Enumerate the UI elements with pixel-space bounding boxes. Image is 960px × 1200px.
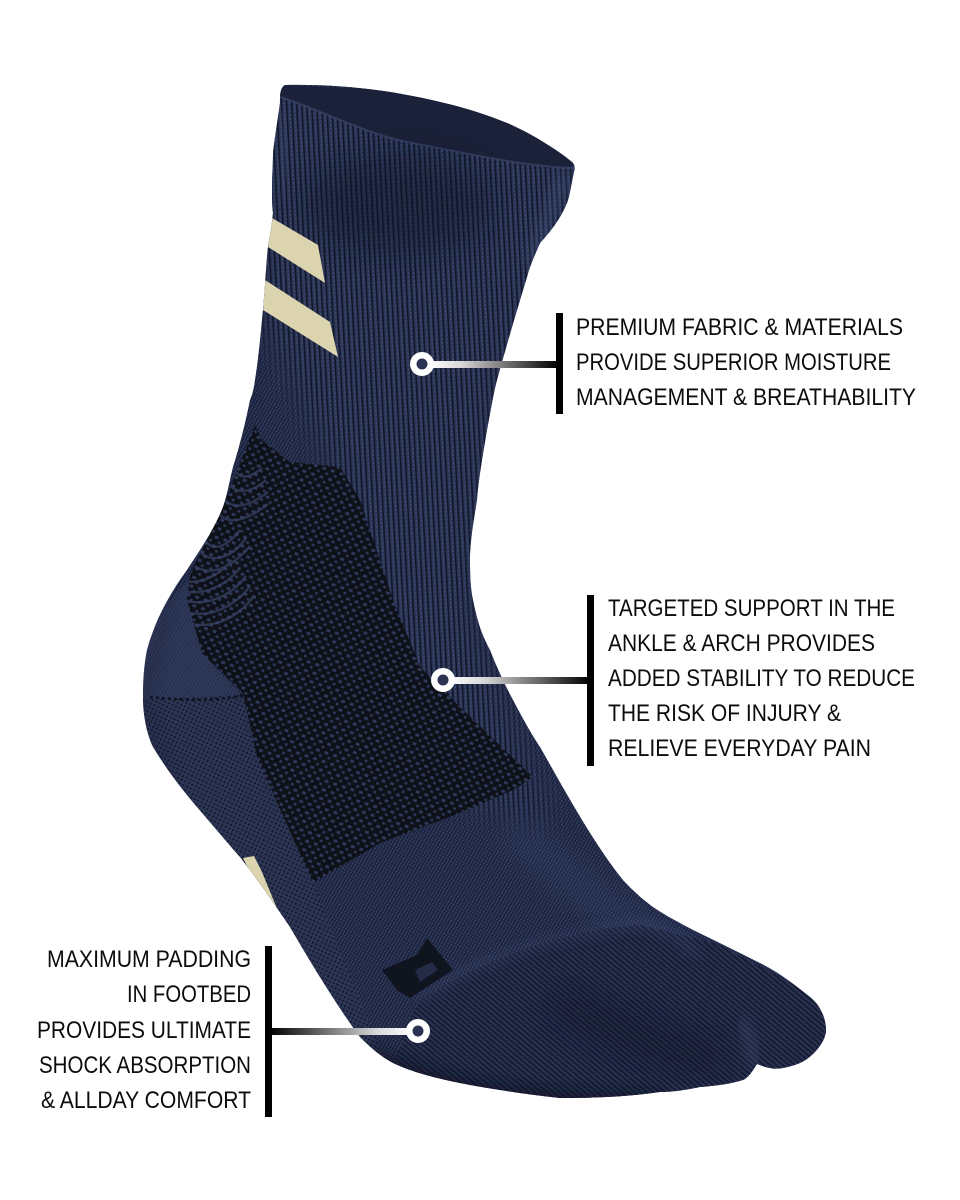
callout text: IN FOOTBED [127, 981, 251, 1008]
sole terry [130, 695, 385, 1060]
marker [434, 671, 452, 689]
callout text: & ALLDAY COMFORT [41, 1087, 251, 1114]
callout text [37, 946, 251, 1114]
callout text: MAXIMUM PADDING [47, 946, 251, 973]
gold stripe upper [268, 218, 325, 283]
cuff right highlight [530, 175, 565, 265]
sole edge shadow [370, 1050, 660, 1099]
callout text: PROVIDES ULTIMATE [37, 1017, 251, 1044]
gold stripe lower [263, 280, 338, 357]
toe dark shade [560, 1000, 720, 1060]
callout: maximum padding [37, 946, 427, 1117]
callout text [608, 595, 915, 762]
foot top highlight [513, 830, 684, 934]
callout text: PROVIDE SUPERIOR MOISTURE [576, 349, 891, 376]
callout: premium fabric [413, 313, 916, 414]
callout text: SHOCK ABSORPTION [39, 1052, 251, 1079]
support panel: ankle and arch [187, 425, 533, 883]
marker [409, 1022, 427, 1040]
connector line [449, 677, 589, 684]
toe tip highlight [742, 1020, 755, 1065]
bracket bar [587, 595, 594, 766]
callout text: PREMIUM FABRIC & MATERIALS [576, 314, 903, 341]
toe panel [393, 925, 840, 1110]
callout text: MANAGEMENT & BREATHABILITY [576, 384, 916, 411]
sock illustration [130, 70, 840, 1110]
marker [413, 355, 431, 373]
bracket bar [556, 313, 563, 414]
toe logo [382, 938, 453, 998]
callout text: ANKLE & ARCH PROVIDES [608, 630, 875, 657]
cuff centre shade [305, 155, 495, 255]
callout text: THE RISK OF INJURY & [608, 700, 841, 727]
sock body [143, 85, 826, 1098]
ribbed leg and cuff [258, 84, 575, 838]
toe ridge [420, 925, 700, 1000]
heel seam [150, 695, 243, 700]
connector line [428, 361, 558, 368]
callout: targeted support [434, 595, 915, 766]
heel panel above seam [143, 582, 240, 700]
leg edge shading [146, 252, 268, 767]
cuff left highlight [282, 110, 285, 200]
cuff opening inner [280, 85, 578, 168]
connector line [270, 1028, 412, 1035]
callout text: TARGETED SUPPORT IN THE [608, 595, 895, 622]
bracket bar [265, 946, 272, 1117]
sole gold marks [243, 856, 276, 907]
callout text [576, 314, 916, 411]
callout text: ADDED STABILITY TO REDUCE [608, 665, 915, 692]
cuff rim highlight [280, 97, 572, 168]
callout text: RELIEVE EVERYDAY PAIN [608, 735, 871, 762]
heel cup arcs [180, 468, 268, 625]
